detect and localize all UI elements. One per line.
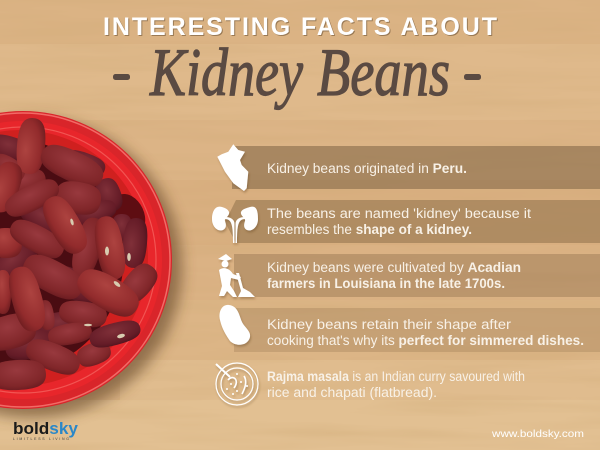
fact 4: [267, 317, 584, 348]
red bowl: [0, 111, 172, 409]
script title: Beans: [317, 34, 450, 110]
icon: kidney bean: [219, 305, 250, 345]
icon: Peru map: [217, 144, 248, 191]
fact 3: [267, 260, 521, 291]
fact 2: The beans are named 'kidney' because it: [267, 206, 531, 221]
icon: curry bowl: [216, 363, 258, 405]
bowl shadow: [0, 118, 182, 418]
website url: www.boldsky.com: [491, 428, 584, 440]
Boldsky logo: boldsky: [13, 419, 79, 438]
script title: [113, 34, 481, 110]
bowl of kidney beans: [0, 111, 172, 409]
fact 2: resembles the shape of a kidney.: [267, 222, 472, 237]
fact 2: [267, 206, 531, 237]
fact 4: Kidney beans retain their shape after: [267, 317, 512, 332]
icon: kidneys: [212, 207, 258, 243]
fact 5: Rajma masala is an Indian curry savoured with: [267, 369, 525, 384]
beans: [0, 117, 163, 391]
fact 5: [267, 369, 525, 400]
fact 4: cooking that's why its perfect for simmered dishes.: [267, 333, 584, 348]
Boldsky logo: LIMITLESS LIVING: [13, 437, 69, 441]
banner 3: [234, 254, 600, 297]
fact 5: rice and chapati (flatbread).: [267, 385, 437, 400]
fact 1: Kidney beans originated in Peru.: [267, 161, 467, 176]
fact 3: Kidney beans were cultivated by Acadian: [267, 260, 521, 275]
fact 3: farmers in Louisiana in the late 1700s.: [267, 276, 505, 291]
banner 2: [225, 200, 600, 243]
title line: INTERESTING FACTS ABOUT: [103, 13, 497, 41]
icon: farmer: [218, 254, 255, 297]
banner 1: [232, 146, 600, 189]
banner 4: [234, 308, 600, 352]
script title: Kidney: [149, 34, 304, 110]
